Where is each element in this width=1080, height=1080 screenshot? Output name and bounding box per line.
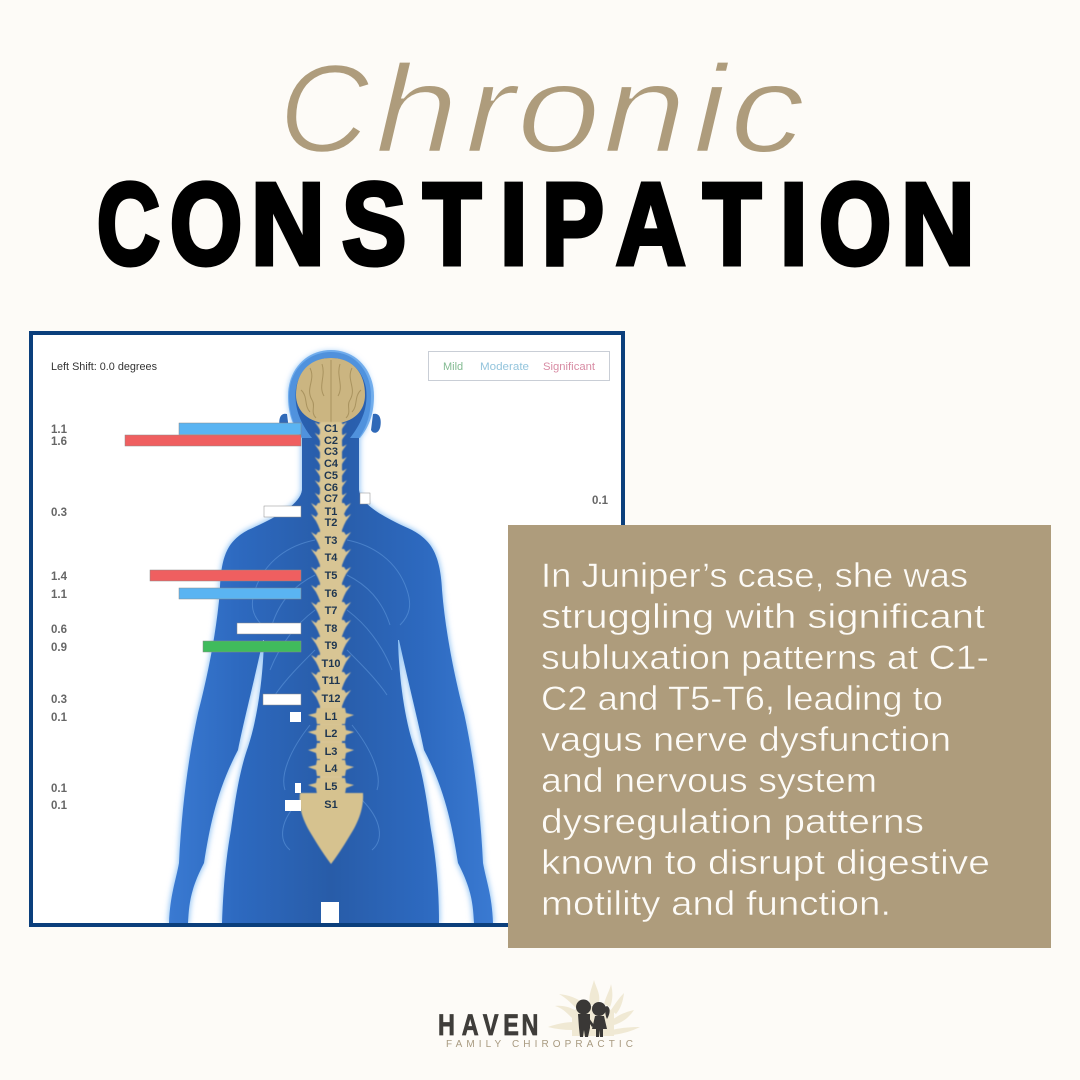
case text: known to disrupt digestive [541,844,990,882]
shift values: 0.3 [51,694,67,706]
title: CONSTIPATION: I [500,159,527,289]
case text: motility and function. [541,885,891,923]
title: CONSTIPATION: N [901,160,975,289]
case text: subluxation patterns at C1- [541,639,989,677]
shift heading: Left Shift: 0.0 degrees [51,361,157,373]
vertebra labels: T9 [325,640,337,652]
vertebra labels: T10 [322,658,340,670]
ears [279,414,381,433]
head highlight [288,350,374,438]
case text: and nervous system [541,762,877,800]
title: CONSTIPATION: T [703,160,761,289]
title: CONSTIPATION: N [251,160,325,289]
panel: case description [508,525,1051,948]
case text: dysregulation patterns [541,803,924,841]
vertebra labels: C4 [324,458,339,470]
title: Chronic: i [693,40,730,179]
vertebra labels: C5 [324,470,338,482]
vertebra labels: T8 [325,623,337,635]
nerves [252,540,410,850]
spine [300,422,363,864]
panel: spine scan [31,333,623,925]
title: CONSTIPATION: I [780,159,807,289]
title: CONSTIPATION: O [819,160,891,289]
vertebra labels: T2 [325,517,337,529]
vertebra labels: C3 [324,446,338,458]
vertebra labels: C6 [324,482,338,494]
vertebra labels: T1 [325,506,337,518]
vertebra labels [322,423,340,811]
vertebra labels: T7 [325,605,337,617]
title: CONSTIPATION: O [170,160,242,289]
title: CONSTIPATION: T [423,160,481,289]
title: Chronic: n [603,40,686,179]
legend: Moderate [480,361,529,373]
title: CONSTIPATION: C [97,159,160,289]
case text [541,557,990,923]
title: Chronic: o [517,40,600,179]
title: Chronic: r [465,40,520,179]
logo name: HAVEN [438,1008,538,1042]
shift values: 1.6 [51,436,67,448]
icon: sun rays [548,980,640,1036]
title: Chronic [279,40,805,179]
vertebra labels: T4 [325,552,338,564]
bar chart: left and right shift bars [125,423,370,923]
icon: two children silhouettes [576,1000,610,1037]
case text: C2 and T5-T6, leading to [541,680,943,718]
vertebra labels: C7 [324,493,338,505]
legend: Significant [543,361,595,373]
shift values: 0.1 [592,495,609,507]
title: Chronic: h [375,40,458,179]
shift values: 0.9 [51,642,67,654]
legend [428,352,610,380]
vertebra labels: L4 [325,763,338,775]
figure: blue body silhouette [169,350,493,923]
shift values: 1.1 [51,589,68,601]
vertebra labels: L1 [325,711,337,723]
shift values [51,424,609,812]
vertebra labels: T5 [325,570,337,582]
vertebra labels: L2 [325,728,337,740]
title: CONSTIPATION: S [342,160,406,289]
case text: vagus nerve dysfunction [541,721,951,759]
shift values: 1.4 [51,571,68,583]
vertebra labels: T3 [325,535,337,547]
vertebra labels: L3 [325,746,337,758]
vertebra labels: T12 [322,693,340,705]
logo tagline: FAMILY CHIROPRACTIC [446,1039,633,1050]
vertebra labels: C1 [324,423,338,435]
vertebra labels: C2 [324,435,338,447]
title: CONSTIPATION: P [542,160,604,289]
logo: Haven Family Chiropractic [438,980,640,1050]
vertebra labels: S1 [324,799,338,811]
title: CONSTIPATION: A [616,160,686,289]
legend: Mild [443,361,463,373]
title: CONSTIPATION [97,159,975,289]
case text: In Juniper’s case, she was [541,557,968,595]
shift values: 0.1 [51,783,68,795]
brain [296,358,365,424]
vertebra labels: T11 [322,675,340,687]
title: Chronic: c [730,40,805,179]
vertebra labels: T6 [325,588,337,600]
shift values: 0.6 [51,624,67,636]
shift values: 0.3 [51,507,67,519]
vertebra labels: L5 [325,781,337,793]
shift values: 1.1 [51,424,68,436]
shift values: 0.1 [51,712,68,724]
shift values: 0.1 [51,800,68,812]
case text: struggling with significant [541,598,986,636]
title: Chronic: C [279,40,370,179]
